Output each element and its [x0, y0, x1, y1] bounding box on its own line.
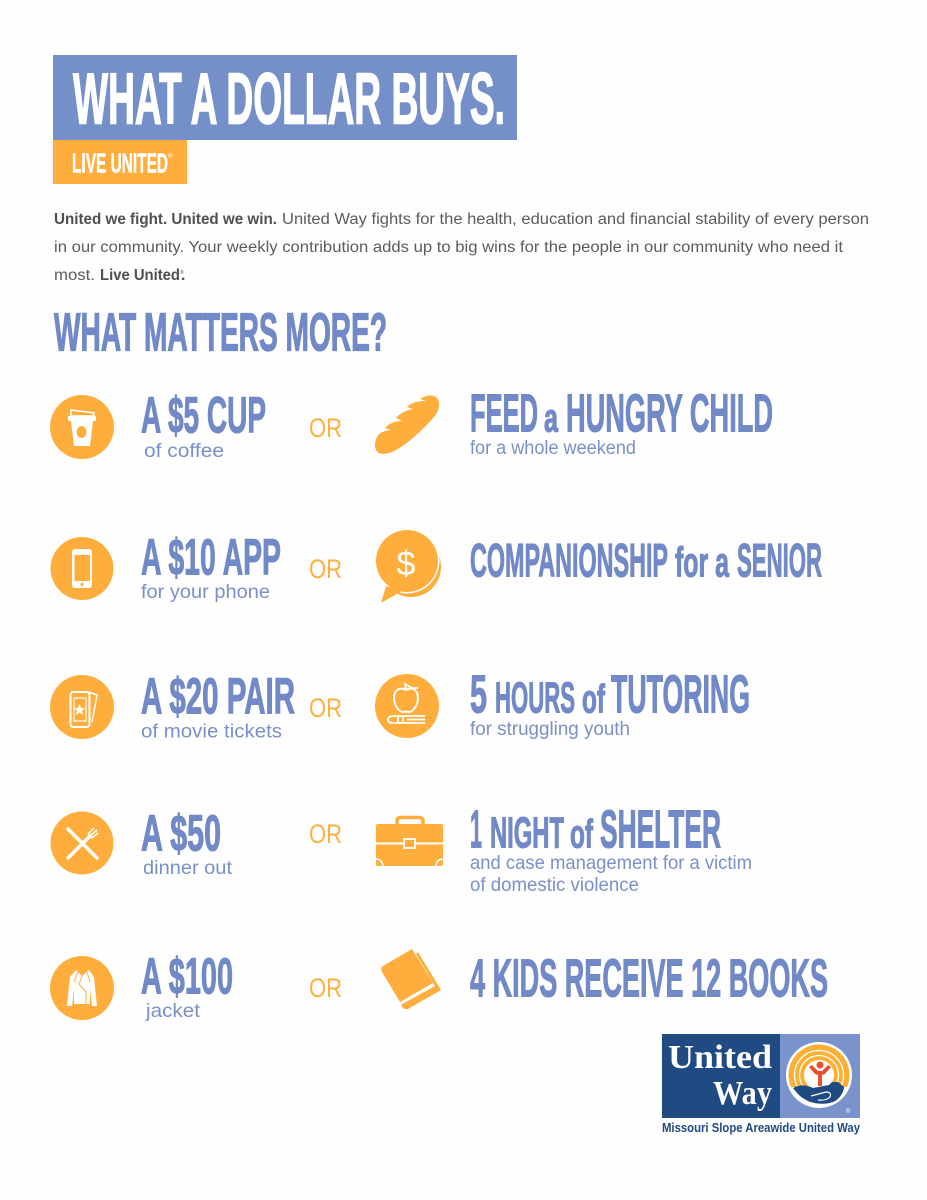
intro paragraph: ® — [180, 269, 184, 276]
icon: movie tickets — [50, 675, 114, 739]
benefit: companionship for a senior: COMPANIONSHIP — [470, 534, 668, 586]
cost: $50: A $50 — [141, 804, 221, 862]
intro paragraph: in our community. Your weekly contribution adds up to big wins for the people in our community who need it — [54, 239, 844, 256]
icon: speech bubble with dollar — [374, 528, 441, 603]
logo emblem — [786, 1042, 852, 1115]
intro paragraph: most. — [54, 267, 95, 284]
or: OR — [309, 693, 342, 723]
benefit: shelter: NIGHT — [490, 808, 564, 858]
icon: book — [381, 949, 441, 1009]
benefit: shelter: 1 — [470, 800, 482, 860]
infographic page — [50, 55, 868, 1134]
intro paragraph: Live United — [100, 267, 180, 284]
intro paragraph: . — [181, 267, 185, 284]
benefit: shelter — [470, 800, 752, 896]
icon: briefcase — [376, 818, 443, 866]
cost: $100: A $100 — [141, 948, 233, 1004]
cost: $20 pair: A $20 PAIR — [141, 668, 295, 724]
row 4: dinner vs shelter — [50, 800, 752, 896]
benefit: shelter: and case management for a victim — [470, 852, 752, 874]
or: OR — [309, 819, 342, 849]
live united tag: ® — [168, 153, 173, 160]
intro paragraph — [54, 211, 869, 284]
intro paragraph: United we fight. United we win. — [54, 211, 277, 228]
icon: jacket — [50, 956, 114, 1020]
benefit: feed a hungry child: FEED — [470, 384, 538, 444]
title banner — [53, 55, 517, 140]
benefit: tutoring — [470, 664, 750, 740]
icon: knife and fork — [50, 812, 114, 874]
benefit: feed a hungry child: for a whole weekend — [470, 437, 636, 459]
live united tag — [53, 140, 187, 184]
row 1: coffee vs feed a child — [50, 384, 773, 462]
logo wordmark — [668, 1039, 772, 1112]
benefit: tutoring: HOURS — [495, 674, 575, 722]
live united tag: LIVE UNITED — [72, 148, 168, 178]
infographic page: TUTORING — [611, 664, 750, 724]
benefit: tutoring: 5 — [470, 664, 487, 724]
or: OR — [309, 554, 342, 584]
or: OR — [309, 413, 342, 443]
title banner: WHAT A DOLLAR BUYS. — [73, 60, 505, 140]
logo wordmark: United — [668, 1039, 772, 1076]
cost: $20 pair — [141, 668, 295, 742]
logo: united way — [662, 1034, 860, 1135]
icon: speech bubble with dollar: $ — [397, 545, 416, 583]
infographic page: SENIOR — [737, 534, 822, 586]
benefit: shelter: of domestic violence — [470, 874, 639, 896]
cost: $5 cup: of coffee — [144, 440, 224, 462]
cost: $10 app: A $10 APP — [141, 528, 281, 586]
logo caption: Missouri Slope Areawide United Way — [662, 1121, 860, 1135]
icon: coffee cup — [50, 395, 114, 459]
cost: $50: dinner out — [143, 857, 233, 879]
benefit: tutoring: for struggling youth — [470, 718, 630, 740]
row 3: movie tickets vs tutoring — [50, 664, 750, 742]
intro paragraph: United Way fights for the health, education and financial stability of every person — [282, 211, 869, 228]
cost: $5 cup: A $5 CUP — [141, 386, 266, 444]
cost: $100 — [141, 948, 233, 1022]
section heading: WHAT MATTERS MORE? — [54, 302, 387, 362]
row 2: app vs companionship — [50, 528, 822, 603]
cost: $10 app — [141, 528, 281, 603]
cost: $20 pair: of movie tickets — [141, 720, 282, 742]
icon: phone — [50, 537, 114, 600]
row 5: jacket vs books — [50, 948, 828, 1022]
cost: $5 cup — [141, 386, 266, 462]
cost: $100: jacket — [145, 1000, 201, 1022]
benefit: tutoring: of — [582, 678, 605, 722]
logo emblem: ® — [846, 1108, 851, 1115]
benefit: shelter: of — [570, 812, 593, 856]
benefit: feed a hungry child: a — [544, 396, 558, 440]
cost: $50 — [141, 804, 233, 879]
icon: apple on books — [375, 674, 439, 738]
benefit: companionship for a senior: for a — [675, 538, 729, 586]
cost: $10 app: for your phone — [141, 581, 270, 603]
icon: bread — [375, 395, 439, 454]
benefit: shelter: SHELTER — [600, 800, 721, 860]
benefit: feed a hungry child — [470, 384, 773, 459]
logo wordmark: Way — [713, 1075, 772, 1112]
or: OR — [309, 973, 342, 1003]
